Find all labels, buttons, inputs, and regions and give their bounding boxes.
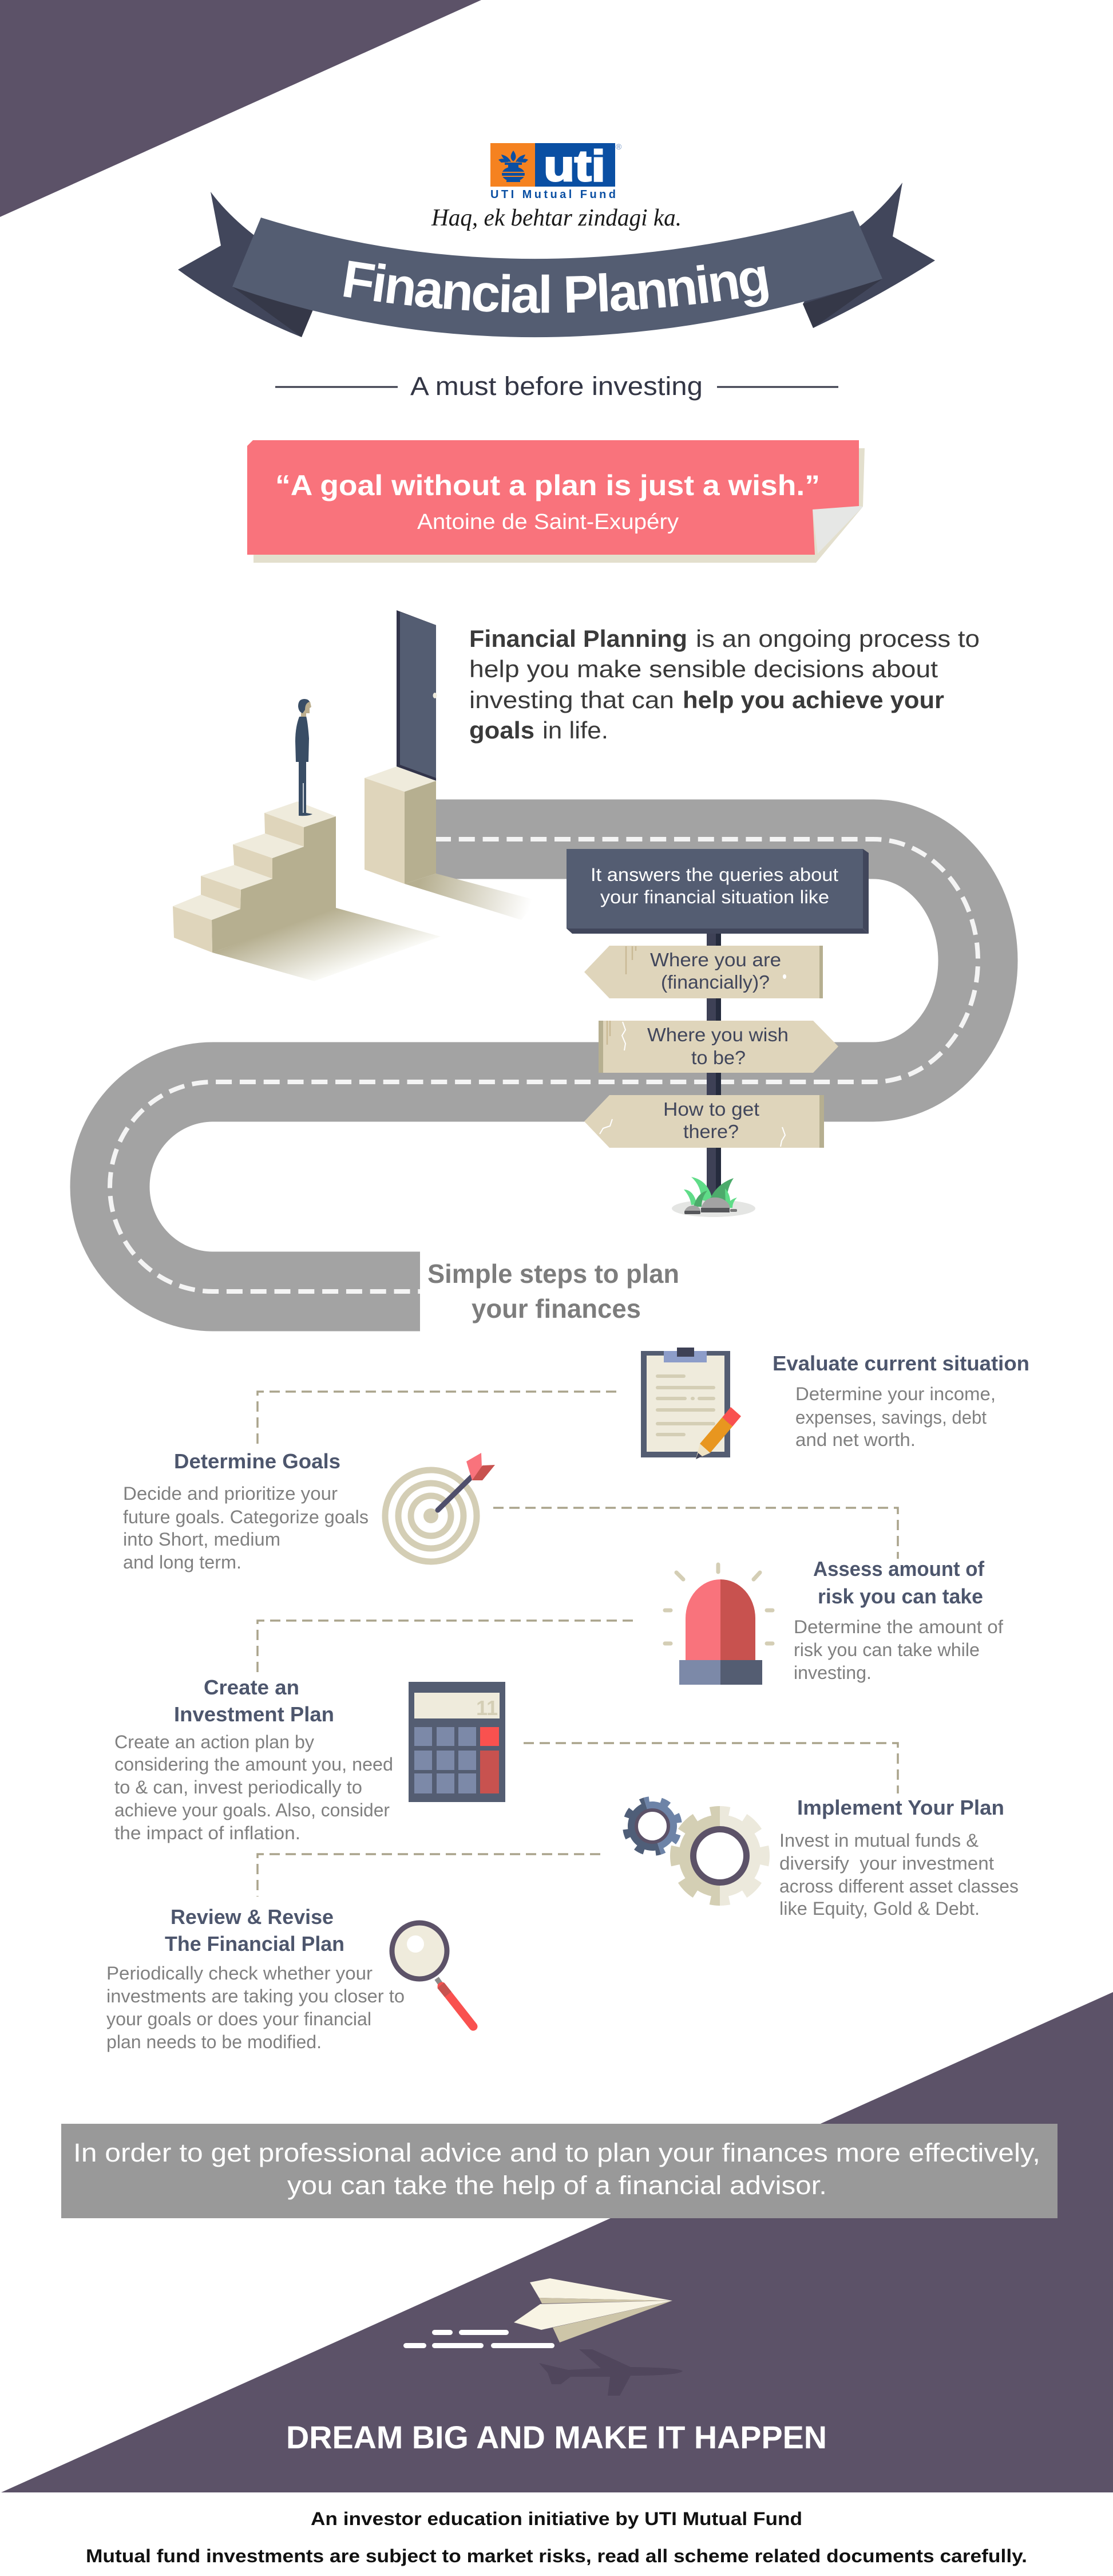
top-left corner triangle — [0, 0, 481, 217]
step tops — [173, 801, 336, 920]
door on block — [365, 610, 537, 920]
footer text: An investor education initiative by UTI Mutual Fund — [311, 2508, 802, 2529]
icon: calculator: 11 — [476, 1696, 498, 1720]
call-out box: In order to get professional advice and to plan your finances more effectively, — [73, 2138, 1040, 2167]
stairs — [173, 801, 441, 981]
icon: siren — [665, 1564, 773, 1685]
UTI logo — [490, 142, 622, 201]
heading: Determine Goals — [174, 1449, 340, 1473]
sign: where you are — [584, 946, 823, 998]
bottom background triangle — [1, 1992, 1113, 2492]
page curl — [813, 506, 863, 554]
logo name: UTI Mutual Fund — [490, 188, 616, 201]
description: your goals or does your financial — [106, 2009, 371, 2029]
icon: pencil — [696, 1407, 741, 1459]
subtitle with rules: A must before investing — [410, 372, 703, 401]
grass and rocks — [684, 1177, 737, 1214]
step: assess risk — [665, 1557, 1003, 1685]
sign: where you are: (financially)? — [661, 971, 770, 993]
post — [707, 930, 721, 1205]
description — [779, 1830, 1019, 1919]
logo blue block with uti wordmark: ® — [616, 142, 622, 151]
heading: Review & Revise — [171, 1905, 334, 1929]
footer text — [86, 2508, 1027, 2566]
heading: Assess amount of — [813, 1557, 985, 1581]
intro paragraph: in life. — [542, 717, 608, 744]
description: Decide and prioritize your — [123, 1483, 338, 1504]
description: Create an action plan by — [114, 1732, 314, 1752]
logo blue block with uti wordmark — [535, 142, 622, 191]
description: investing. — [794, 1662, 872, 1683]
heading — [813, 1557, 985, 1608]
heading: risk you can take — [818, 1585, 983, 1608]
icon: magnifying glass — [392, 1923, 473, 2026]
description: Invest in mutual funds & — [779, 1830, 979, 1851]
headline board — [567, 849, 869, 934]
description: to & can, invest periodically to — [114, 1777, 362, 1797]
small gear — [623, 1796, 682, 1856]
heading: Evaluate current situation — [773, 1352, 1029, 1375]
door block — [365, 767, 436, 884]
road — [110, 839, 978, 1291]
icon: target with dart — [385, 1453, 495, 1562]
door shadow — [405, 874, 537, 920]
description: expenses, savings, debt — [795, 1407, 987, 1428]
heading — [174, 1676, 334, 1726]
ribbon right tail — [803, 183, 935, 328]
ribbon left tail — [178, 192, 313, 337]
description — [114, 1732, 393, 1843]
description: Determine your income, — [795, 1384, 996, 1404]
sign: where you wish to be: to be? — [691, 1047, 746, 1068]
heading: simple steps — [427, 1259, 679, 1323]
icon: paper plane — [514, 2278, 672, 2342]
heading: Implement Your Plan — [797, 1796, 1004, 1819]
icon: calculator — [409, 1682, 505, 1802]
quote author: Antoine de Saint-Exupéry — [417, 510, 679, 534]
sign: how to get there: there? — [683, 1121, 739, 1142]
footer text: Mutual fund investments are subject to market risks, read all scheme related documents carefully. — [86, 2546, 1027, 2566]
heading: simple steps: your finances — [472, 1294, 641, 1323]
intro paragraph — [469, 625, 980, 744]
logo orange block with kalash icon — [490, 143, 535, 187]
card face — [247, 440, 859, 555]
step: implement plan — [619, 1792, 1019, 1919]
description: Periodically check whether your — [106, 1963, 373, 1984]
heading: The Financial Plan — [165, 1932, 344, 1955]
stairs shadow — [212, 908, 441, 981]
step: create investment plan — [114, 1676, 505, 1843]
quote card — [247, 440, 865, 563]
motion dashes — [403, 2330, 554, 2348]
intro paragraph: investing that can — [469, 686, 674, 713]
description: plan needs to be modified. — [106, 2032, 322, 2052]
step: evaluate current situation — [641, 1348, 1029, 1459]
headline board: your financial situation like — [600, 887, 829, 907]
description — [123, 1483, 369, 1573]
description — [794, 1617, 1003, 1683]
intro paragraph: help you make sensible decisions about — [469, 655, 938, 682]
door — [397, 610, 437, 781]
person standing on stairs — [295, 699, 312, 816]
heading: Create an — [204, 1676, 299, 1699]
headline board: It answers the queries about — [591, 864, 838, 885]
logo blue block with uti wordmark: uti — [544, 142, 605, 191]
icon: clipboard — [641, 1348, 741, 1459]
intro paragraph: is an ongoing process to — [696, 625, 980, 652]
description: like Equity, Gold & Debt. — [779, 1898, 980, 1919]
quote: “A goal without a plan is just a wish.” — [275, 469, 820, 501]
description: the impact of inflation. — [114, 1823, 300, 1843]
card shadow — [254, 448, 865, 563]
title text: Financial Planning — [343, 260, 769, 313]
ribbon band — [232, 211, 882, 337]
description: considering the amount you, need — [114, 1754, 393, 1775]
description: investments are taking you closer to — [106, 1986, 405, 2006]
icon: airplane shadow — [539, 2349, 683, 2396]
description: achieve your goals. Also, consider — [114, 1800, 390, 1820]
intro paragraph: goals — [469, 717, 534, 744]
description: and net worth. — [795, 1429, 916, 1450]
large gear — [675, 1811, 765, 1901]
stairs dark side — [212, 816, 336, 953]
heading: Investment Plan — [174, 1702, 334, 1726]
grass base shadow — [672, 1200, 755, 1217]
description: risk you can take while — [794, 1639, 980, 1660]
title ribbon — [178, 183, 935, 338]
signpost — [567, 849, 869, 1217]
step faces — [173, 813, 304, 953]
description: into Short, medium — [123, 1529, 280, 1550]
closing slogan: DREAM BIG AND MAKE IT HAPPEN — [286, 2419, 827, 2455]
description: future goals. Categorize goals — [123, 1507, 369, 1527]
description: across different asset classes — [779, 1876, 1019, 1897]
description: diversify your investment — [779, 1853, 994, 1874]
icon: gears — [619, 1792, 765, 1901]
heading — [165, 1905, 344, 1955]
sign: where you wish to be — [599, 1021, 838, 1073]
description: Determine the amount of — [794, 1617, 1003, 1637]
intro paragraph: help you achieve your — [683, 686, 944, 713]
step: review and revise — [106, 1905, 473, 2052]
sign: where you are: Where you are — [650, 949, 781, 970]
sign: where you wish to be: Where you wish — [647, 1024, 789, 1045]
intro paragraph: Financial Planning — [469, 625, 687, 652]
description — [106, 1963, 405, 2052]
call-out box: you can take the help of a financial advisor. — [287, 2171, 827, 2200]
heading: simple steps: Simple steps to plan — [427, 1259, 679, 1289]
sign: how to get there — [584, 1095, 824, 1148]
description: and long term. — [123, 1552, 241, 1573]
description — [795, 1384, 996, 1450]
sign: how to get there: How to get — [663, 1099, 759, 1120]
call-out box — [61, 2124, 1057, 2218]
step: determine goals — [123, 1449, 495, 1573]
tagline: Haq, ek behtar zindagi ka. — [431, 205, 682, 231]
